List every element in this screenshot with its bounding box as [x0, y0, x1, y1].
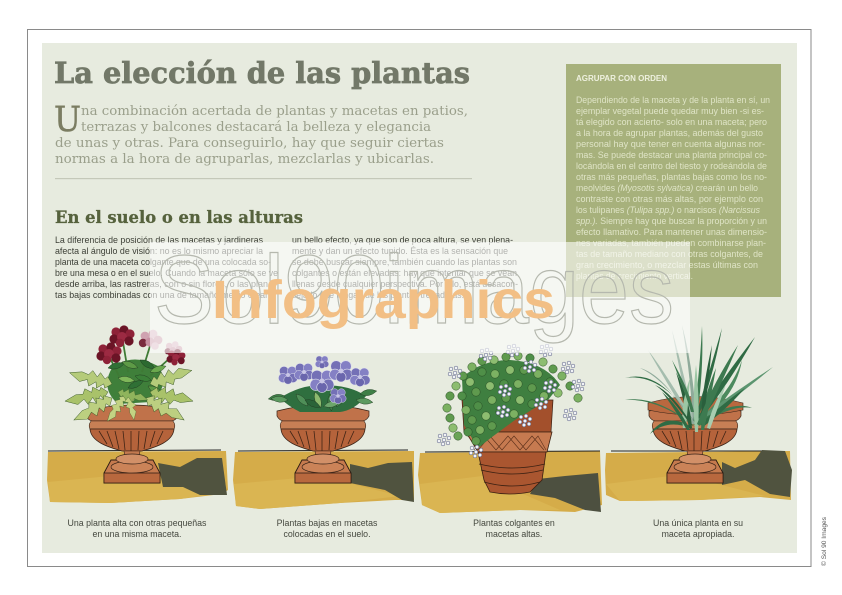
body text column 2: sejado que tengan de las plantas trepadoras. — [292, 290, 464, 300]
watermark — [150, 235, 690, 353]
panel text: nes variadas, también pueden combinarse plan- — [576, 238, 766, 248]
panel text: plantas de crecimiento vertical. — [576, 271, 693, 281]
caption 4: maceta apropiada. — [662, 529, 734, 539]
intro text block: na combinación acertada de plantas y macetas en patios, — [81, 104, 468, 119]
body text column 1: bre una mesa o en el suelo. Cuando la maceta sólo se ve — [55, 268, 278, 278]
caption 4: Una única planta en su — [653, 518, 743, 528]
watermark: sol90images: Sol90images — [154, 235, 674, 344]
caption 2: colocadas en el suelo. — [283, 529, 371, 539]
body text column 2: llenas desde cualquier perspectiva. Por ello, está desacon- — [292, 279, 518, 289]
panel text: contraste con otras más altas, por ejemplo con — [576, 194, 763, 204]
shadow — [722, 450, 792, 497]
urn — [277, 405, 369, 483]
panel text: meolvides (Myosotis sylvatica) crearán un bello — [576, 183, 758, 193]
urn — [86, 405, 178, 483]
panel text: tas de tamaño mediano con otras colgantes, de — [576, 249, 763, 259]
title: La elección de las plantas — [54, 56, 470, 90]
panel text: efecto llamativo. Para mantener unas dimensio- — [576, 227, 767, 237]
section heading: En el suelo o en las alturas — [55, 208, 303, 227]
body text column 2: se debe buscar siempre, también cuando las plantas son — [292, 257, 517, 267]
illustration 3: trailing plant in a tall pot — [418, 344, 602, 513]
credit: © Sol 90 Images — [821, 517, 828, 566]
panel text: personal hay que tener en cuenta algunas nor- — [576, 139, 765, 149]
caption 3: macetas altas. — [486, 529, 542, 539]
body text column 2: mente y dan un efecto tupido. Ésta es la sensación que — [292, 246, 508, 256]
white blossoms — [437, 344, 585, 458]
caption 1: Una planta alta con otras pequeñas — [68, 518, 207, 528]
intro text block — [54, 100, 468, 167]
panel text: otras más pequeñas, plantas bajas como los no- — [576, 172, 767, 182]
drop cap: U — [54, 100, 81, 140]
panel text: mas. Se puede destacar una planta principal co- — [576, 150, 767, 160]
body text column 2 — [292, 235, 518, 300]
ground strip — [605, 451, 791, 501]
intro text block: terrazas y balcones destacará la belleza y elegancia — [81, 120, 431, 135]
panel text: locándola en el centro del tiesto y rodeándola de — [576, 161, 767, 171]
caption 1: en una misma maceta. — [92, 529, 182, 539]
flowers — [96, 325, 185, 365]
caption 3: Plantas colgantes en — [473, 518, 555, 528]
panel text — [576, 95, 770, 281]
ground strip — [418, 451, 602, 513]
body text column 1: desde arriba, las rastreras, con o sin flores, o las plan- — [55, 279, 271, 289]
leaves — [625, 325, 773, 434]
panel heading: AGRUPAR CON ORDEN — [576, 73, 667, 83]
panel text: a la hora de agrupar plantas, además del gusto — [576, 128, 763, 138]
foliage — [268, 385, 377, 412]
body text column 1: planta de una maceta colgante que de una colocada so- — [55, 257, 271, 267]
watermark: infographics: Infographics — [212, 270, 555, 330]
caption 2: Plantas bajas en macetas — [277, 518, 378, 528]
panel text: tá elegido con acierto- solo en una maceta; pero — [576, 117, 767, 127]
body text column 1: tas bajas combinadas con una de tamaño medio crean — [55, 290, 270, 300]
intro text block: normas a la hora de agruparlas, mezclarlas y ubicarlas. — [55, 152, 434, 167]
panel: agrupar con orden — [566, 64, 781, 297]
shadow — [530, 473, 601, 512]
ground strip — [233, 451, 414, 509]
panel text: Dependiendo de la maceta y de la planta en sí, un — [576, 95, 770, 105]
shadow — [158, 458, 227, 495]
illustration 2: low plants in an urn on the floor — [233, 356, 414, 509]
flowers — [278, 356, 370, 404]
body text column 1: afecta al ángulo de visión: no es lo mismo apreciar la — [55, 246, 264, 256]
intro text block: de unas y otras. Para conseguirlo, hay que seguir ciertas — [55, 136, 444, 151]
ground strip — [47, 451, 228, 503]
body text column 1: La diferencia de posición de las macetas y jardineras — [55, 235, 263, 245]
urn — [649, 405, 741, 483]
illustration 1: tall plant with smaller ones in an urn — [47, 325, 228, 503]
panel text: ejemplar vegetal puede quedar muy bien -si es- — [576, 106, 764, 116]
body text column 2: colgantes o están elevadas: hay que intentar que se vean — [292, 268, 517, 278]
foliage — [63, 342, 195, 427]
panel text: gran crecimiento, o mezclar estas últimas con — [576, 260, 758, 270]
shadow — [350, 462, 414, 502]
panel text: los tulipanes (Tulipa spp.) o narcisos (Narcissus — [576, 205, 760, 215]
body text column 1 — [55, 235, 278, 300]
background panel — [42, 43, 797, 553]
pot — [462, 400, 553, 494]
foliage — [443, 352, 582, 448]
body text column 2: un bello efecto, ya que son de poca altura, se ven plena- — [292, 235, 513, 245]
panel text: spp.). Siempre hay que buscar la proporción y un — [576, 216, 767, 226]
illustration 4: single plant in an urn — [605, 325, 792, 501]
